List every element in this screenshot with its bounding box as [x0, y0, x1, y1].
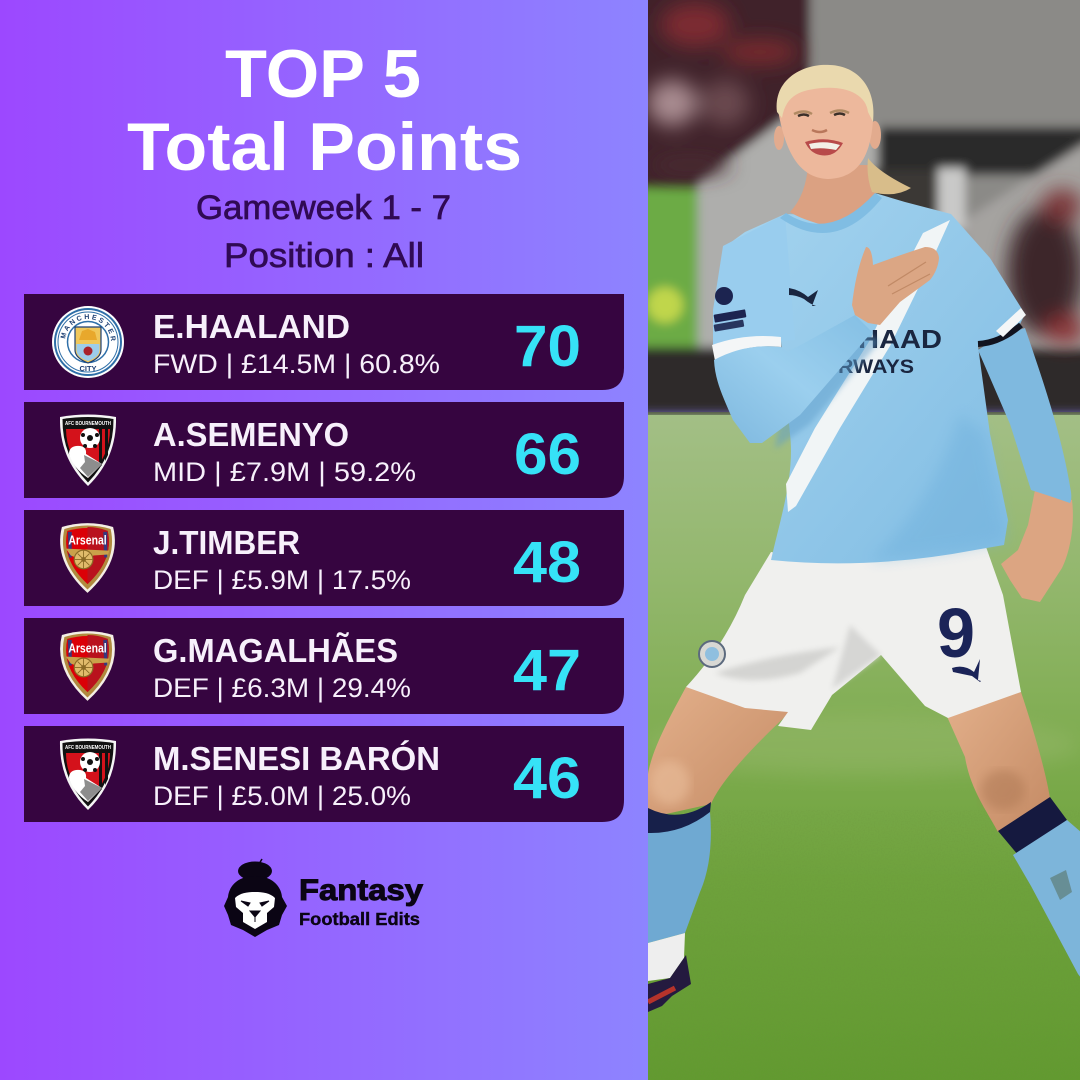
collar [780, 193, 882, 233]
player stats: MID | £7.9M | 59.2% [153, 457, 416, 487]
pitch tonal band [654, 720, 1066, 773]
puma logo on shirt [789, 288, 818, 306]
brand logo: Fantasy Football Edits [224, 859, 423, 937]
head [774, 65, 881, 179]
icon: Arsenal crest [60, 631, 115, 701]
eyes and brows [794, 110, 849, 114]
smile [805, 139, 843, 156]
icon: Bournemouth crest [60, 738, 116, 810]
player figure [648, 65, 1080, 1012]
sponsor [839, 330, 941, 373]
player name: G.MAGALHÃES [153, 632, 398, 670]
shorts [686, 544, 1021, 730]
title [127, 36, 522, 185]
chest hand [852, 247, 939, 325]
icon: Bournemouth crest [60, 414, 116, 486]
icon: Manchester City crest: MANCHESTER [60, 314, 116, 342]
title: TOP 5 [225, 36, 421, 112]
neck [790, 165, 876, 227]
icon: Manchester City crest [52, 306, 124, 378]
icon: Arsenal crest [60, 523, 115, 593]
left sleeve arm [714, 315, 872, 443]
player row: Magalhães [24, 618, 624, 714]
torso jersey [723, 193, 1025, 563]
arm shadow on torso [775, 331, 880, 449]
player stats: DEF | £5.9M | 17.5% [153, 565, 411, 595]
player stats: DEF | £5.0M | 25.0% [153, 781, 411, 811]
subtitle [196, 189, 451, 275]
white right cuff [996, 308, 1026, 337]
blurred stadium background [630, 0, 1080, 414]
wordmark: Fantasy [299, 874, 423, 907]
player name: J.TIMBER [153, 525, 300, 562]
right sleeve [978, 328, 1071, 503]
points: 46 [513, 746, 581, 811]
jersey shading [870, 414, 1006, 560]
sponsor: RWAYS [838, 357, 914, 378]
player name: E.HAALAND [153, 309, 350, 346]
points: 66 [514, 422, 581, 487]
sponsor: HAAD [858, 324, 942, 354]
shorts number 9: 9 [937, 594, 975, 672]
player row: Timber [24, 510, 624, 606]
shoulder sleeve left [713, 224, 778, 345]
title: Total Points [127, 109, 522, 185]
pitch [648, 412, 1080, 1080]
crest on shorts [699, 641, 725, 667]
player row: Haaland [24, 294, 624, 390]
points: 47 [513, 638, 581, 703]
premier league patch [714, 287, 746, 332]
hair [777, 65, 874, 122]
icon: Manchester City crest: CITY [79, 364, 97, 373]
player name: A.SEMENYO [153, 417, 349, 454]
puma logo on shorts [952, 659, 981, 682]
right leg [945, 692, 1050, 832]
right forearm and hand [1001, 490, 1073, 602]
player row: Semenyo [24, 402, 624, 498]
player stats: DEF | £6.3M | 29.4% [153, 673, 411, 703]
ponytail [868, 158, 911, 194]
left leg [648, 687, 790, 818]
grass texture [648, 810, 1080, 1080]
points: 48 [513, 530, 581, 595]
left gradient panel [0, 0, 648, 1080]
armband [978, 325, 1021, 344]
subtitle: Gameweek 1 - 7 [196, 189, 451, 227]
right sock [998, 797, 1080, 990]
white left cuff [712, 336, 781, 361]
left sock [648, 802, 711, 1012]
points: 70 [514, 314, 581, 379]
player name: M.SENESI BARÓN [153, 740, 440, 778]
icon: lion with beret [224, 859, 287, 937]
wordmark [299, 874, 423, 929]
player stats: FWD | £14.5M | 60.8% [153, 349, 440, 379]
wordmark: Football Edits [299, 909, 420, 929]
nose [812, 130, 827, 132]
photo: Haaland celebrating [630, 0, 1080, 1080]
white jersey stripe [786, 220, 950, 512]
subtitle: Position : All [224, 237, 424, 275]
player row: Senesi Barón [24, 726, 624, 822]
